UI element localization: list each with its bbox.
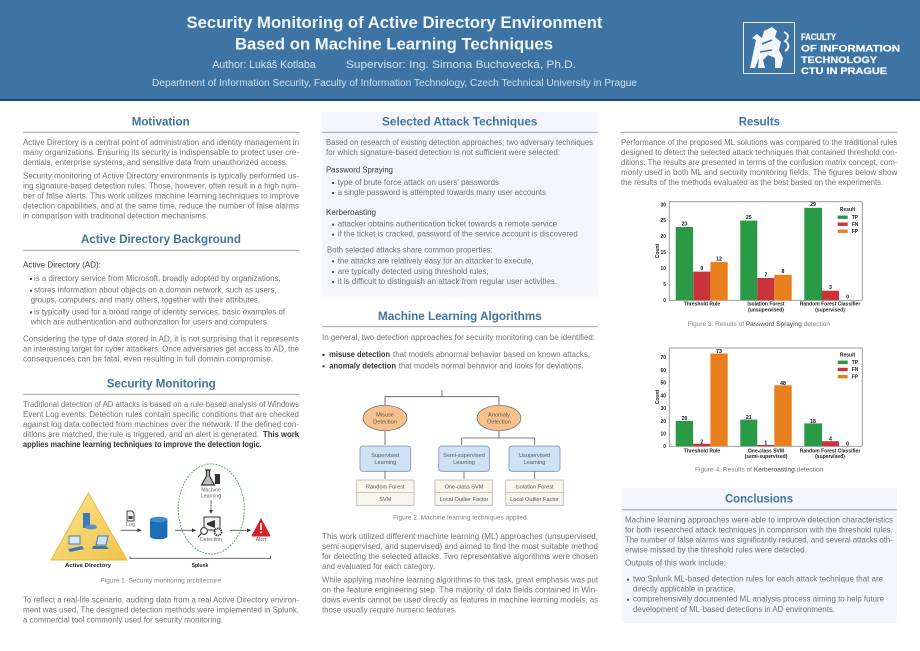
list: outputs: two Splunk ML-based detection rules for each attack technique that are — [633, 575, 884, 584]
text: security monitoring body: This work — [263, 430, 300, 439]
table: semi-supervised algorithms: Local Outlier Factor — [440, 497, 489, 503]
node: unsupervised learning: Learning — [524, 460, 545, 466]
text: motivation body: ing signature-based detection rules. Those, however, often result in a high num- — [23, 182, 299, 191]
subheading: kerberoasting: Kerberoasting — [326, 208, 376, 217]
text: motivation body — [23, 138, 300, 221]
list: active directory properties: is typically used for a broad range of identity services, basic examples of — [34, 307, 286, 316]
bracket: splunk — [130, 556, 271, 558]
node: supervised learning: Learning — [374, 460, 396, 466]
text: machine learning approaches — [322, 532, 599, 615]
panel: results — [620, 114, 898, 474]
arrow: detection to alert — [230, 529, 250, 531]
text: machine learning approaches: on the feature engineering step. The majority of data fields contained in Win- — [322, 586, 598, 595]
x axis labels: Threshold Rule — [684, 302, 720, 308]
text: real-life scenario — [23, 596, 299, 625]
icon: alert: Alert — [256, 537, 267, 543]
heading: security monitoring: Security Monitoring — [107, 377, 216, 391]
text: security monitoring body: Event Log events. Detection rules contain specific conditions that are checked — [23, 410, 299, 419]
panel: active directory background — [23, 232, 300, 364]
text: motivation body: Active Directory is a central point of administration and identity management in — [23, 138, 299, 147]
y axis: 70 — [660, 355, 666, 361]
icon: database — [150, 517, 167, 539]
logo — [744, 22, 900, 76]
list: common properties: are typically detected using threshold rules, — [338, 267, 489, 276]
list: kerberoasting — [332, 220, 578, 239]
text: security monitoring body: ditions are matched, the rule is triggered, and an alert is generated. — [23, 430, 259, 439]
y axis: 30 — [660, 406, 666, 412]
text: conclusions body: The number of false alarms was significantly reduced, and several attacks oth- — [625, 536, 893, 545]
table: supervised algorithms: SVM — [379, 497, 392, 503]
text: active directory target — [23, 335, 300, 364]
y axis: 10 — [660, 432, 666, 438]
text: conclusions body: erwise missed by the threshold rules were detected. — [625, 546, 807, 555]
text: results body: Performance of the proposed ML solutions was compared to the traditional rules — [621, 138, 897, 147]
text: results body: ditions. The results are presented in terms of the confusion matrix concept, com- — [621, 158, 898, 167]
text: machine learning approaches: This work utilized different machine learning (ML) approaches (unsupervised, — [322, 532, 598, 541]
y axis: 15 — [660, 250, 666, 256]
text: common properties: Both selected attacks share common properties: — [327, 246, 493, 255]
icon: detection — [198, 517, 222, 543]
value labels: 20 — [682, 416, 687, 422]
heading: machine learning algorithms: Machine Learning Algorithms — [378, 309, 542, 323]
list: common properties: it is difficult to distinguish an attack from regular user activities. — [338, 277, 557, 286]
text: intro: Based on research of existing detection approaches, two adversary techniques — [326, 138, 593, 147]
bars: random forest — [804, 208, 839, 300]
list: password spraying: type of brute force attack on users' passwords — [338, 178, 499, 187]
y axis: 30 — [660, 202, 666, 208]
panel: motivation — [23, 114, 300, 221]
label: machine learning: Machine — [201, 488, 221, 494]
y axis — [655, 355, 666, 450]
value labels: 12 — [716, 256, 722, 262]
value labels: 2 — [700, 440, 703, 446]
legend: FP — [852, 374, 859, 380]
x axis labels — [684, 448, 860, 460]
text: security monitoring body: against log data collected from machines over the network. If the defined con- — [23, 420, 299, 429]
x axis labels: (supervised) — [815, 454, 845, 460]
legend: FN — [852, 367, 859, 373]
heading: motivation: Motivation — [132, 114, 190, 128]
label: machine learning: Learning — [201, 493, 221, 499]
y axis: 25 — [660, 218, 666, 224]
y axis: 0 — [663, 444, 666, 450]
chart: password spraying results — [655, 202, 862, 314]
label: active directory: Active Directory — [65, 563, 111, 569]
icon: active directory triangle — [51, 493, 127, 560]
value labels: 7 — [764, 272, 767, 278]
logo: OF INFORMATION — [801, 42, 900, 54]
list: password spraying — [332, 178, 546, 197]
list: detection approaches: anomaly detection — [329, 361, 396, 370]
heading: active directory background: Active Directory Background — [81, 232, 241, 246]
subheading: password spraying: Password Spraying — [326, 166, 393, 175]
value labels: 29 — [810, 202, 816, 208]
authors — [212, 59, 576, 71]
text: motivation body: many organizations. Ensuring its security is indispensable to protect user cre- — [23, 148, 299, 157]
list: outputs: development of ML-based detections in AD environments. — [633, 605, 835, 614]
bars: one-class svm — [740, 385, 792, 446]
list: common properties — [332, 256, 557, 286]
node: semi-supervised learning: Semi-supervised — [443, 453, 485, 459]
list: common properties: the attacks are relatively easy for an attacker to execute, — [338, 256, 534, 265]
legend — [838, 207, 859, 235]
list: detection approaches: that models normal behavior and looks for deviations. — [399, 361, 584, 370]
text: real-life scenario: To reflect a real-life scenario, auditing data from a real Active Directory environ- — [23, 596, 299, 605]
y axis: 20 — [660, 234, 666, 240]
node: misuse detection: Detection — [373, 420, 397, 426]
y axis: 20 — [660, 419, 666, 425]
text: motivation body: in comparison with traditional detection mechanisms. — [23, 212, 208, 221]
text: active directory target: Considering the type of data stored in AD, it is not surprising that it represents — [23, 335, 299, 344]
text: machine learning approaches: dows events cannot be used directly as features in machine learning models, as — [322, 596, 598, 605]
list: detection approaches: misuse detection — [329, 350, 390, 359]
diagram: machine learning techniques — [357, 390, 563, 505]
legend: FP — [852, 229, 859, 235]
y axis: 5 — [663, 282, 666, 288]
logo: TECHNOLOGY — [801, 54, 878, 65]
text: results body — [621, 138, 898, 187]
x axis labels: Random Forest Classifier — [800, 302, 860, 308]
list: kerberoasting: if the ticket is cracked, password of the service account is discovered — [338, 230, 578, 239]
value labels: 1 — [764, 440, 767, 446]
value labels: 21 — [746, 415, 752, 421]
legend: Result — [840, 207, 855, 213]
text: motivation body: dentials, enterprise systems, and sensitive data from unauthorized access. — [23, 158, 288, 167]
value labels: 3 — [829, 285, 832, 291]
text: conclusions body: for both researched attack techniques in comparison with the threshold rules. — [625, 526, 893, 535]
panel: conclusions — [622, 488, 897, 623]
x axis labels: Isolation Forest — [747, 302, 785, 308]
list: detection approaches: that models abnormal behavior based on known attacks, — [393, 350, 590, 359]
heading: selected attack techniques: Selected Attack Techniques — [382, 114, 538, 128]
text: machine learning approaches: and evaluated for each category. — [322, 562, 435, 571]
text: machine learning approaches: those usually require numeric features. — [322, 606, 457, 615]
table: supervised algorithms — [357, 480, 414, 505]
text: security monitoring body: applies machine learning techniques to improve the detection logic. — [23, 440, 262, 449]
text: motivation body: ber of false alerts. This work utilizes machine learning techniques to improve — [23, 192, 300, 201]
subheading: active directory: Active Directory (AD): — [23, 260, 101, 269]
x axis labels: One-class SVM — [748, 448, 784, 454]
list: password spraying: a single password is attempted towards many user accounts — [338, 188, 546, 197]
y axis: 50 — [660, 380, 666, 386]
list: kerberoasting: attacker obtains authentication ticket towards a remote service — [338, 220, 558, 229]
text: active directory target: an interesting target for cyber attackers. Once adversaries get access to AD, the — [23, 345, 300, 354]
arrow: storage to detection — [175, 529, 195, 531]
x axis labels: (unsupervised) — [748, 308, 784, 314]
node: unsupervised learning: Usupervised — [519, 453, 550, 459]
text: security monitoring body: Traditional detection of AD attacks is based on a rule-based analysis of Windows — [23, 400, 299, 409]
arrow: machine learning to detection — [210, 500, 212, 513]
value labels: 4 — [829, 436, 832, 442]
authors: Author: Lukáš Kotlaba — [212, 59, 317, 71]
authors: Supervisor: Ing. Simona Buchovecká, Ph.D. — [346, 59, 576, 71]
text: conclusions body — [625, 516, 893, 567]
header band — [0, 0, 920, 101]
heading: conclusions: Conclusions — [725, 492, 793, 506]
node: misuse detection: Misuse — [376, 412, 394, 418]
x axis labels: (supervised) — [815, 308, 845, 314]
list: active directory properties: is a directory service from Microsoft, broadly adopted by organizations, — [34, 274, 281, 283]
panel: machine learning algorithms — [322, 309, 599, 615]
list: active directory properties: groups, computers, and many others, together with their attributes, — [31, 296, 260, 305]
text: machine learning approaches: semi-supervised, and supervised) and aimed to find the most suitable method — [322, 542, 598, 551]
list: outputs: comprehensively documented ML analysis process aiming to help future — [633, 595, 885, 604]
text: motivation body: detection capabilities, and at the same time, reduce the number of false alarms — [23, 202, 299, 211]
x axis labels: (semi-supervised) — [745, 454, 788, 460]
value labels: 8 — [782, 269, 785, 275]
text: real-life scenario: ment was used. The designed detection methods were implemented in Splunk, — [23, 606, 299, 615]
icon: alert — [252, 519, 270, 543]
text: results body: the results of the methods evaluated as the best based on the experiments. — [621, 178, 883, 187]
title: Security Monitoring of Active Directory Environment — [186, 13, 603, 32]
title — [186, 13, 603, 54]
bars: random forest — [804, 423, 839, 446]
table: supervised algorithms: Random Forest — [366, 484, 405, 490]
text: intro — [326, 138, 593, 157]
icon: detection: Detection — [200, 537, 222, 543]
table: semi-supervised algorithms: One-class SVM — [445, 484, 484, 490]
text: motivation body: Security monitoring of Active Directory environments is typically performed us- — [23, 172, 299, 181]
title: Based on Machine Learning Techniques — [235, 34, 553, 54]
y axis: Count — [655, 389, 661, 404]
arrow: log to storage — [121, 529, 141, 531]
node: unsupervised learning — [509, 446, 560, 471]
department: Department of Information Security, Faculty of Information Technology, Czech Technical University in Prague — [152, 78, 637, 89]
legend: Result — [840, 353, 855, 359]
y axis: Count — [655, 243, 661, 258]
value labels: 23 — [682, 222, 687, 228]
text: intro: for which signature-based detection is not sufficient were selected: — [326, 148, 560, 157]
node: anomaly detection: Anomaly — [488, 412, 510, 418]
table: unsupervised algorithms — [506, 480, 563, 505]
value labels: 25 — [746, 215, 752, 221]
value labels: 0 — [846, 294, 849, 300]
logo: CTU IN PRAGUE — [801, 65, 887, 76]
list: detection approaches — [322, 350, 590, 370]
label: machine learning — [201, 488, 221, 499]
table: semi-supervised algorithms — [435, 480, 493, 505]
caption: figure 1: Figure 1. Security monitoring architecture — [101, 578, 222, 585]
node: misuse detection — [363, 405, 407, 431]
legend: TP — [852, 360, 859, 366]
node: anomaly detection: Detection — [487, 420, 511, 426]
y axis: 60 — [660, 368, 666, 374]
value labels: 9 — [700, 266, 703, 272]
list: outputs — [627, 575, 885, 614]
list: active directory properties — [30, 274, 286, 326]
text: security monitoring body — [23, 400, 300, 449]
icon: log file: Log — [126, 522, 135, 528]
icon: flask — [202, 470, 220, 485]
value labels: 73 — [716, 349, 722, 355]
label: splunk: Splunk — [192, 563, 209, 569]
list: outputs: directly applicable in practice, — [633, 585, 735, 594]
table: unsupervised algorithms: Local Outlier Factor — [510, 497, 559, 503]
value labels: 0 — [846, 442, 849, 448]
text: approaches intro: In general, two detection approaches for security monitoring can be identified: — [322, 333, 595, 342]
y axis: 40 — [660, 394, 666, 400]
icon: log file — [126, 511, 135, 528]
panel: selected attack techniques — [322, 112, 598, 296]
text: active directory target: consequences can be fatal, even resulting in full domain compromise. — [23, 355, 273, 364]
node: semi-supervised learning — [439, 446, 489, 471]
y axis — [655, 202, 666, 304]
text: conclusions body: Machine learning approaches were able to improve detection characteristics — [625, 516, 893, 525]
legend: TP — [852, 215, 859, 221]
outline: dashed ellipse — [178, 464, 244, 554]
legend: FN — [852, 222, 859, 228]
list: active directory properties: stores information about objects on a domain network, such as users, — [34, 286, 277, 295]
x axis labels: Threshold Rule — [684, 448, 720, 454]
panel: security monitoring — [23, 377, 300, 625]
figure 1: security monitoring architecture — [51, 464, 271, 569]
list: active directory properties: which are authentication and authorization for users and computers. — [30, 317, 269, 326]
x axis labels: Random Forest Classifier — [800, 448, 860, 454]
caption: figure 2: Figure 2. Machine learning techniques applied — [393, 515, 527, 522]
bars: threshold rule — [676, 227, 728, 300]
text: conclusions body: Outputs of this work include: — [625, 558, 726, 567]
table: unsupervised algorithms: Isolation Forest — [515, 484, 554, 490]
x axis labels — [684, 302, 860, 314]
legend — [838, 353, 859, 380]
heading: results: Results — [739, 114, 780, 128]
node: supervised learning: Supervised — [371, 453, 399, 459]
bars: threshold rule — [676, 354, 728, 446]
chart: kerberoasting results — [655, 348, 862, 460]
text: machine learning approaches: While applying machine learning algorithms to this task, great emphasis was put — [322, 576, 599, 585]
value labels: 48 — [780, 381, 786, 387]
node: supervised learning — [360, 446, 411, 471]
logo: FACULTY — [801, 31, 837, 42]
y axis: 0 — [663, 298, 666, 304]
bars: isolation forest — [740, 221, 792, 300]
value labels: 18 — [810, 419, 816, 425]
text: results body: monly used in both ML and security monitoring fields. The figures below show — [621, 168, 898, 177]
caption: figure 4: Figure 4. Results of Kerberoasting detection — [695, 467, 824, 474]
text: results body: designed to detect the selected attack techniques that contained threshold con- — [621, 148, 898, 157]
text: machine learning approaches: for detecting the selected attacks. Two representative algorithms were chosen — [322, 552, 598, 561]
node: semi-supervised learning: Learning — [453, 460, 475, 466]
y axis: 10 — [660, 266, 666, 272]
caption: figure 3: Figure 3. Results of Password Spraying detection — [688, 321, 831, 328]
node: anomaly detection — [477, 405, 521, 431]
value labels — [682, 349, 849, 448]
text: real-life scenario: a commercial tool commonly used for security monitoring. — [23, 616, 223, 625]
value labels — [682, 202, 849, 300]
